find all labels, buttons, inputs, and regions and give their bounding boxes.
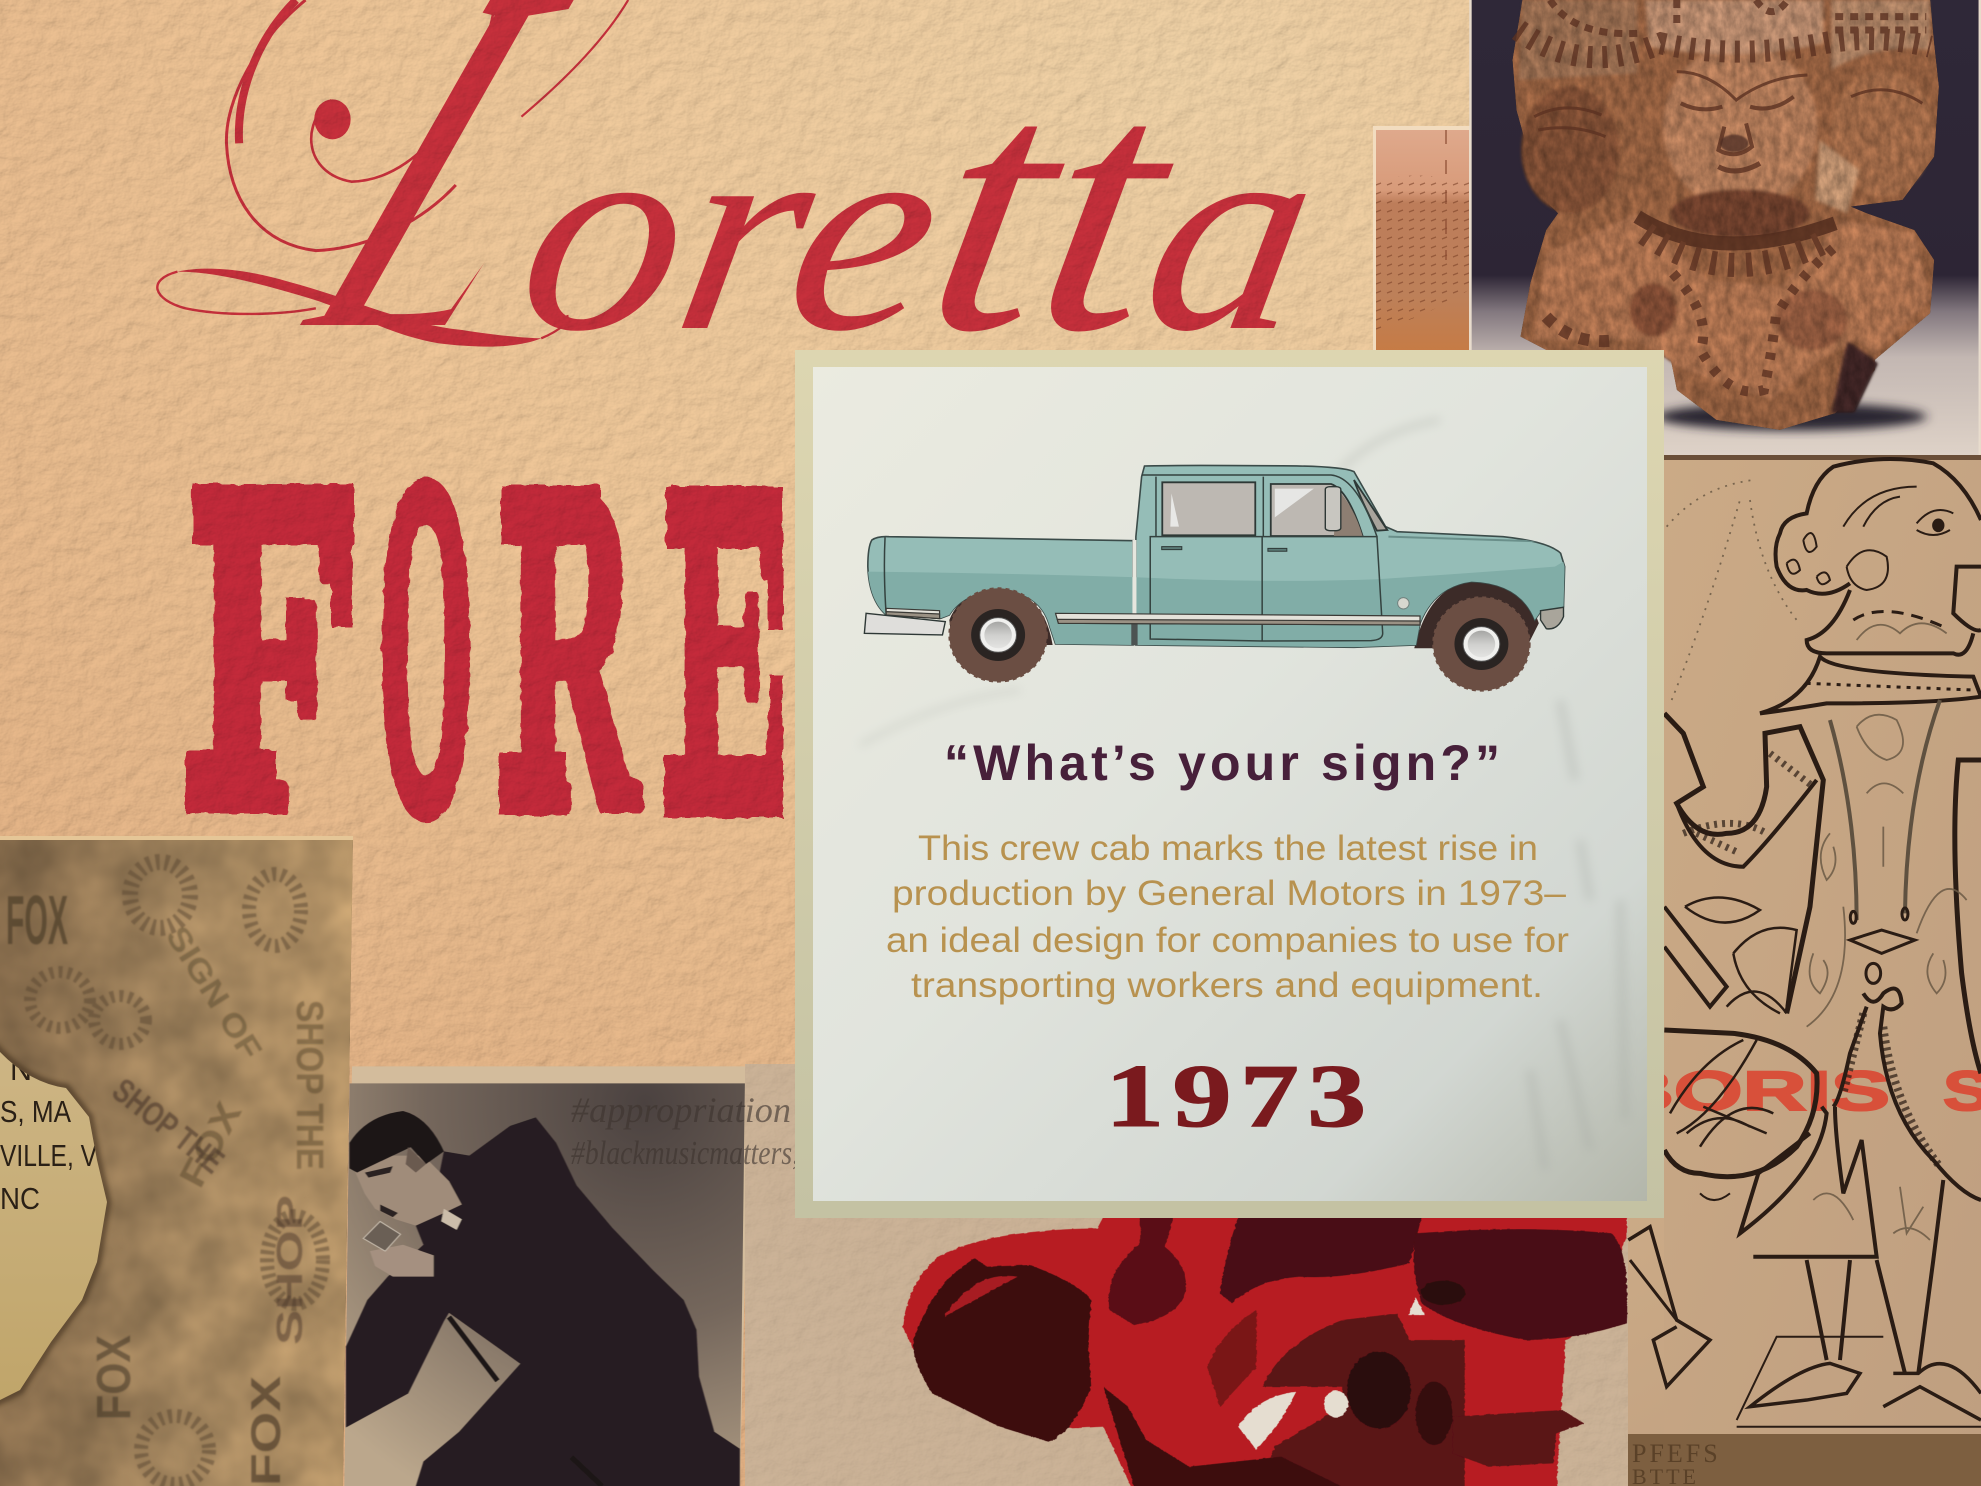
stamp: rotated SHOP THE FOX text: FOX: [88, 1335, 141, 1420]
brown strip with print: [1628, 1434, 1981, 1486]
panel: sculpture photograph: [1469, 0, 1981, 467]
crowns: [1645, 0, 1823, 54]
stamp: rotated SHOP THE FOX text: SHOP THE: [105, 1071, 231, 1181]
wood type word: FORE: O: [379, 381, 473, 910]
singer silhouette: [346, 1111, 740, 1486]
panel: singer photograph: [344, 1066, 750, 1486]
truck door lines: [884, 475, 1383, 641]
stamp: rotated SHOP THE FOX text: SHOP: [269, 1195, 310, 1345]
handwriting: appropriation hashtags: #appropriation: [571, 1090, 791, 1130]
truck windows: [1162, 480, 1387, 536]
address label text in the hole: N: [10, 1052, 32, 1087]
swash: script capital flourishes: [157, 0, 628, 347]
stamp: rotated SHOP THE FOX text: FOX: [171, 1095, 249, 1194]
body text: production by General Motors in 1973–: [892, 874, 1567, 913]
panel: caption card: [795, 350, 1664, 1218]
truck wheel wells: [949, 581, 1539, 648]
truck lower body shade: [866, 537, 1566, 650]
address label text in the hole: NC: [0, 1181, 40, 1216]
text: E: [670, 381, 788, 910]
rear wheel: [949, 588, 1047, 682]
letter R: [499, 381, 641, 910]
handwriting: appropriation hashtags: [571, 1090, 799, 1172]
stamp: rotated SHOP THE FOX text: SIGN OF: [159, 920, 269, 1066]
letter F: [185, 381, 354, 910]
heading: What's your sign?: “What’s your sign?”: [944, 735, 1500, 791]
truck door handles: [1162, 547, 1287, 551]
torn hole edge: [0, 1052, 107, 1400]
right face: [1831, 70, 1934, 197]
address label text in the hole: [0, 1064, 96, 1210]
letter E: [664, 381, 788, 910]
panel: orange swatch: [1373, 126, 1471, 352]
panel: elephant drawing paper: [1610, 455, 1981, 1486]
chest highlights: [1534, 213, 1930, 400]
address label text in the hole: VILLE, V: [0, 1138, 97, 1173]
wood type word: FORE: R: [505, 381, 641, 910]
body text: transporting workers and equipment.: [911, 966, 1543, 1005]
front wheel: [1433, 597, 1530, 691]
panel: elephant drawing paper: PFEFS: [1632, 1439, 1721, 1468]
centre face: [1662, 51, 1818, 196]
statue body: [1512, 0, 1939, 430]
truck emblem: [1398, 598, 1409, 609]
face: [355, 1156, 462, 1226]
stamp: rotated SHOP THE FOX text: [88, 920, 330, 1486]
panel: torn FOX stamped paper: FOX: [6, 881, 68, 959]
hand: [370, 1245, 434, 1277]
orange name initial: S: [1943, 1059, 1981, 1122]
body text: This crew cab marks the latest rise in: [918, 829, 1538, 868]
wood type word: FORE: [185, 381, 788, 910]
panel: tan paper with red ink: [745, 1064, 1630, 1486]
letter F: F: [192, 381, 348, 910]
body text: [886, 829, 1569, 1005]
lowercase letters oretta: oretta: [498, 10, 1350, 406]
microphone: [363, 1221, 401, 1251]
truck side trim: [886, 608, 1420, 625]
truck gap between bed and cab: [1132, 540, 1136, 645]
year: 1973: 1973: [1105, 1046, 1366, 1146]
script title: Loretta: [156, 0, 1306, 347]
truck mirror: [1325, 487, 1341, 531]
truck bed and cab body: [868, 465, 1565, 647]
stamp: rotated SHOP THE FOX text: FOX: [242, 1376, 289, 1486]
left face: [1520, 87, 1619, 213]
truck window highlights: [1170, 493, 1179, 527]
stamp: floral seals: [30, 862, 323, 1484]
illustration: teal crew cab pickup truck: [864, 465, 1566, 691]
panel: torn FOX stamped paper: [0, 836, 353, 1486]
stamp: rotated SHOP THE FOX text: SHOP THE: [288, 1000, 330, 1170]
body text: an ideal design for companies to use for: [886, 921, 1569, 960]
red ink painting: [903, 1217, 1627, 1486]
statue carved details: [1518, 0, 1930, 392]
card scuff marks: [860, 420, 1625, 1170]
ink figure drawing: [1628, 459, 1981, 1427]
handwriting: appropriation hashtags: #blackmusicmatters,: [571, 1135, 799, 1172]
address label text in the hole: S, MA: [0, 1094, 71, 1129]
neck shadow: [1671, 189, 1809, 237]
truck rear bumper: [864, 613, 945, 635]
orange name text: BORIS: [1610, 1059, 1890, 1122]
truck front bumper: [1541, 607, 1564, 629]
